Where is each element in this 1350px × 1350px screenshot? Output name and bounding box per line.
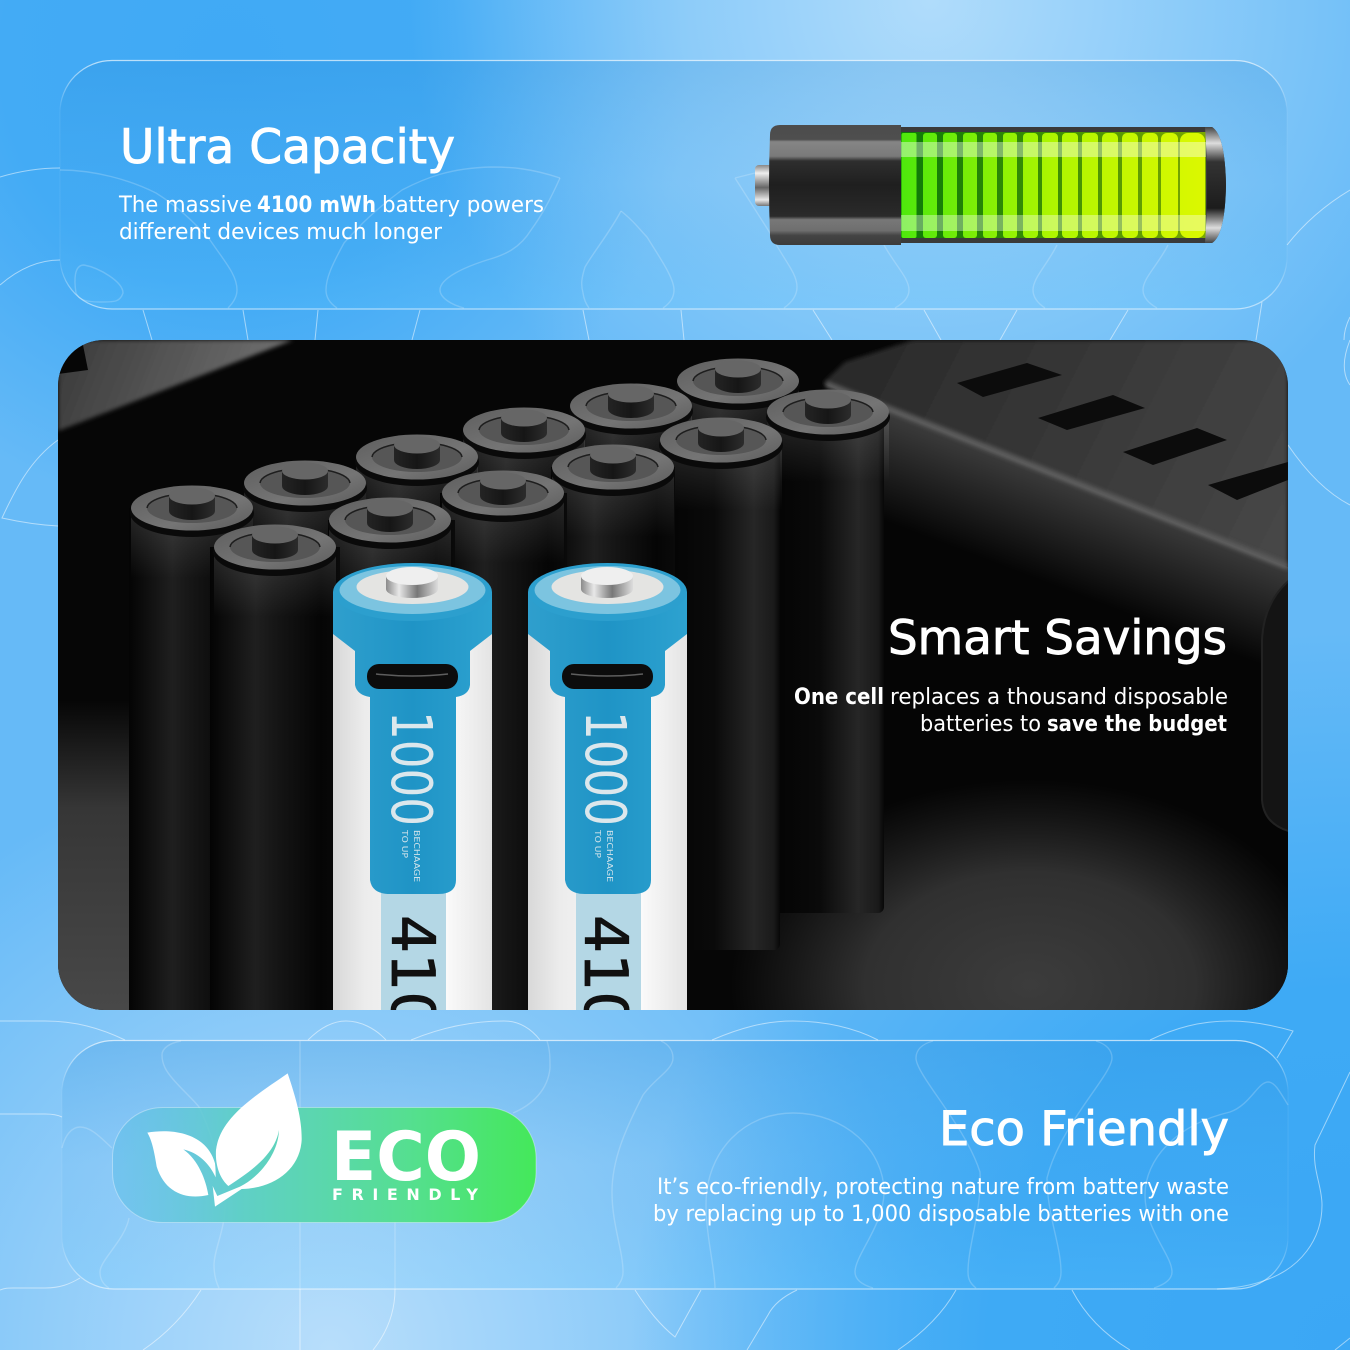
table floor [760,800,1288,1010]
text: ultra capacity description: battery powers [382,193,544,218]
battery label: left: 410 [377,915,447,1030]
charger surface upper left [58,340,293,431]
battery label: left: BECHAAGE [412,830,421,882]
charger side outlet [1261,580,1288,832]
battery label: right [584,716,630,1010]
left floor [58,719,129,1010]
panel: smart savings photo [58,340,1292,1030]
icon: charging battery [755,125,1226,245]
text: ultra capacity description [118,193,544,245]
battery label: left: TO UP [400,829,409,858]
panel leaf outlines [62,1041,1288,1289]
badge wordmark: ECO [331,1118,481,1197]
text: ultra capacity description: 4100 mWh [257,193,376,218]
icon: white leaves [147,1073,302,1207]
charger notch [60,345,88,374]
text: eco friendly description: by replacing up to 1,000 disposable batteries with one [653,1202,1229,1227]
panel: ultra capacity [60,60,1287,309]
black batteries [129,358,890,1020]
heading: smart savings: Smart Savings [888,611,1227,666]
text: ultra capacity description: The massive [118,193,252,218]
heading: ultra capacity: Ultra Capacity [120,120,455,175]
battery label: right: 1000 [572,711,637,826]
text: eco friendly description [653,1175,1229,1227]
text: smart savings description: replaces a thousand disposable [890,685,1228,710]
text: smart savings description: One cell [794,685,884,710]
battery label: right: BECHAAGE [605,830,614,882]
heading: eco friendly: Eco Friendly [939,1102,1229,1157]
text: smart savings description [794,685,1228,737]
text: eco friendly description: It’s eco-friendly, protecting nature from battery waste [657,1175,1229,1200]
battery label: right: 410 [570,915,640,1030]
text: smart savings description: save the budget [1047,712,1227,737]
battery label: left [390,716,436,1010]
battery: white and blue left [333,563,492,1030]
panel: eco friendly [62,1040,1288,1289]
badge: eco friendly pill [112,1073,536,1222]
battery: white and blue right [528,563,687,1030]
battery label: left: 1000 [378,711,443,826]
panel leaf outlines [60,167,1168,308]
usb slots [957,363,1288,500]
text: ultra capacity description: different devices much longer [119,220,443,245]
badge sub-wordmark: FRIENDLY [332,1185,478,1204]
text: smart savings description: batteries to [920,712,1041,737]
usb charger body [823,340,1292,1010]
battery label: right: TO UP [593,829,602,858]
